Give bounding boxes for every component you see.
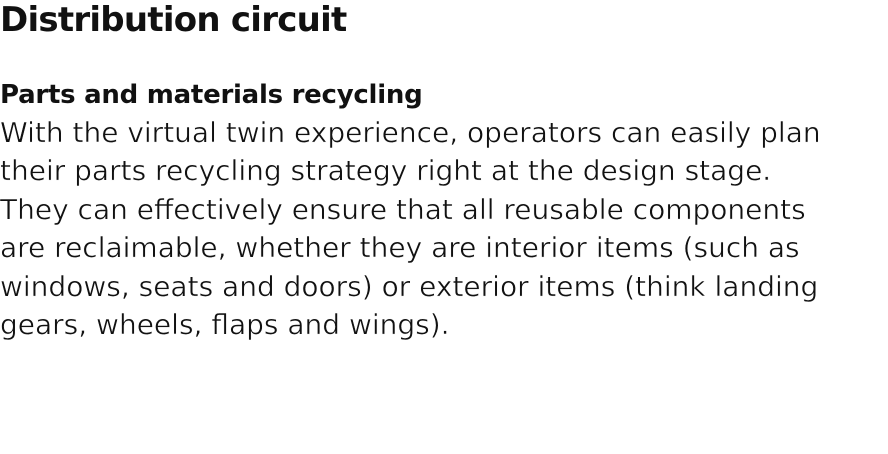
body text block: are reclaimable, whether they are interior items (such as bbox=[0, 231, 800, 264]
body text block: gears, wheels, flaps and wings). bbox=[0, 308, 450, 341]
body text block: windows, seats and doors) or exterior items (think landing bbox=[0, 270, 818, 303]
body text block: They can effectively ensure that all reusable components bbox=[0, 193, 806, 226]
subheading: Parts and materials recycling bbox=[0, 80, 422, 110]
body text block bbox=[0, 116, 821, 341]
title: Distribution circuit bbox=[0, 0, 346, 40]
body text block: their parts recycling strategy right at the design stage. bbox=[0, 154, 771, 187]
body text block: With the virtual twin experience, operators can easily plan bbox=[0, 116, 821, 149]
